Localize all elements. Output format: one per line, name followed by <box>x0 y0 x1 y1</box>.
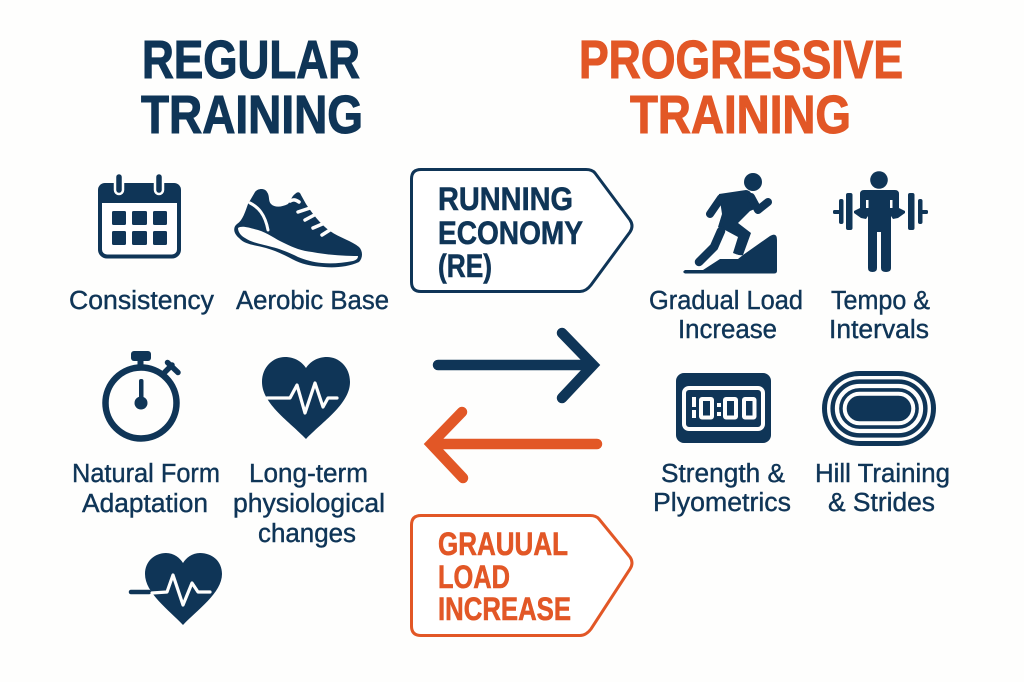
icon: person with dumbbell <box>833 171 928 272</box>
title: progressive training <box>579 30 903 145</box>
label: tempo and intervals: Intervals <box>829 316 929 344</box>
label: hill training and strides: Hill Training <box>815 460 950 488</box>
title: regular training: REGULAR <box>142 30 360 90</box>
label: strength and plyometrics: Strength & <box>661 460 785 488</box>
label: natural form adaptation: Adaptation <box>82 490 208 518</box>
callout: gradual load increase: GRAUUAL <box>438 526 568 562</box>
arrow: right navy <box>438 333 593 398</box>
label: long-term physiological changes: physiological <box>233 490 385 518</box>
callout: running economy: ECONOMY <box>438 215 583 251</box>
label: gradual load increase: Increase <box>678 316 777 344</box>
title: progressive training: PROGRESSIVE <box>579 30 903 90</box>
label: natural form adaptation <box>72 460 220 518</box>
label: tempo and intervals <box>829 287 930 344</box>
callout: gradual load increase <box>412 516 632 636</box>
label: long-term physiological changes: Long-term <box>249 460 368 488</box>
icon: heart with pulse line <box>131 553 222 625</box>
callout: gradual load increase: LOAD <box>438 559 510 595</box>
callout: gradual load increase: INCREASE <box>438 591 571 627</box>
label: consistency: Consistency <box>69 287 214 315</box>
title: regular training <box>141 30 363 145</box>
icon: running shoe <box>234 189 362 267</box>
label: gradual load increase <box>649 287 803 344</box>
label: aerobic base: Aerobic Base <box>236 287 389 315</box>
label: strength and plyometrics: Plyometrics <box>653 489 791 517</box>
icon: stopwatch <box>106 351 178 438</box>
title: regular training: TRAINING <box>141 85 363 145</box>
label: gradual load increase: Gradual Load <box>649 287 803 315</box>
icon: runner on hill <box>683 173 777 274</box>
label: natural form adaptation: Natural Form <box>72 460 220 488</box>
callout: running economy: (RE) <box>438 248 492 284</box>
icon: running track <box>822 371 936 446</box>
callout: running economy <box>412 170 632 292</box>
icon: calendar <box>98 173 181 256</box>
icon: heart with pulse <box>262 357 350 439</box>
arrow: left orange <box>431 412 597 478</box>
label: tempo and intervals: Tempo & <box>831 287 930 315</box>
label: long-term physiological changes: changes <box>258 520 356 548</box>
title: progressive training: TRAINING <box>630 85 851 145</box>
label: long-term physiological changes <box>233 460 385 548</box>
label: hill training and strides: & Strides <box>828 489 935 517</box>
callout: running economy: RUNNING <box>438 181 573 217</box>
icon: digital timer <box>676 373 771 443</box>
label: strength and plyometrics <box>653 460 791 517</box>
label: hill training and strides <box>815 460 950 517</box>
